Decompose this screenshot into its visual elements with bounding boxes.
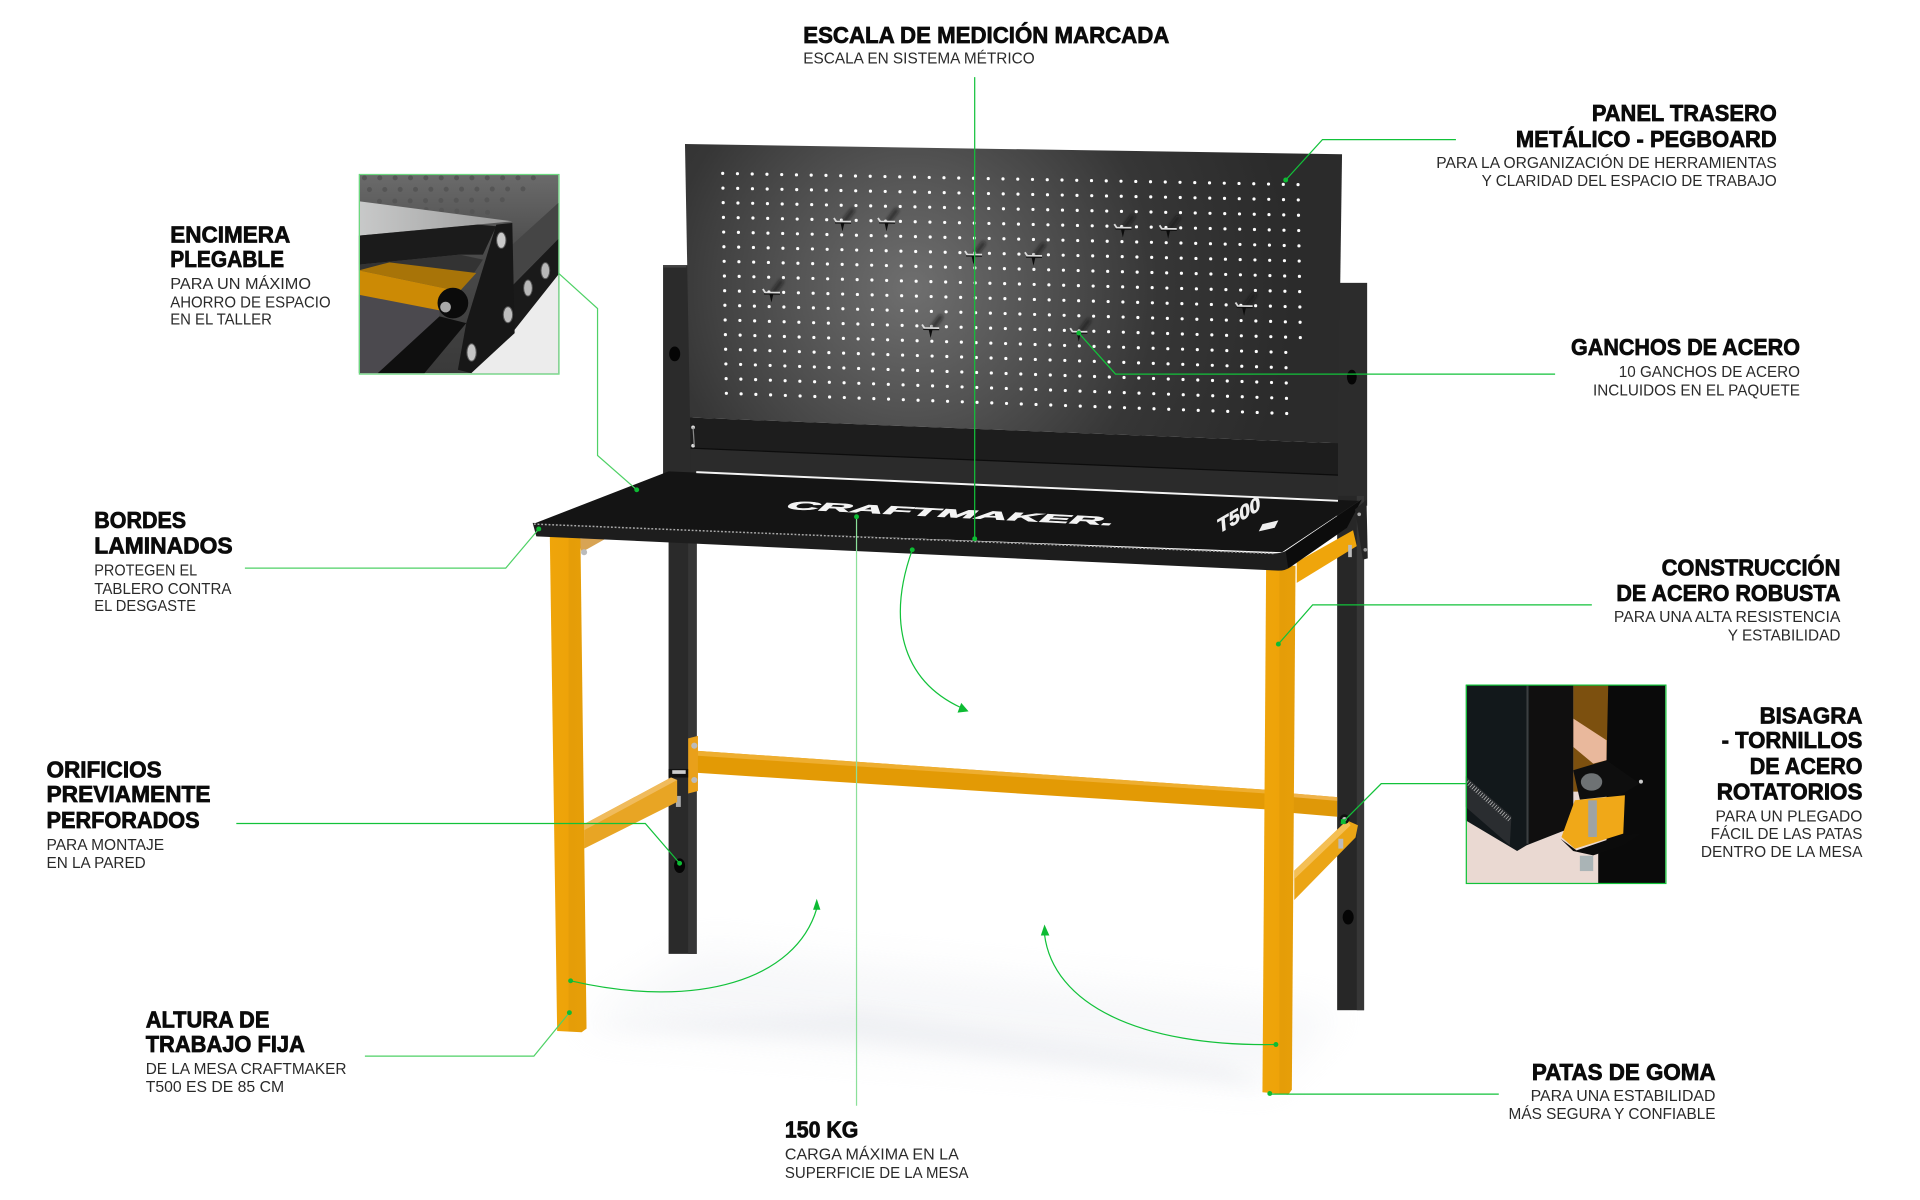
label: laminated edges: BORDES: [94, 507, 186, 533]
label: pegboard: PARA LA ORGANIZACIÓN DE HERRAMIENTAS: [1436, 155, 1777, 172]
label: hinge: ROTATORIOS: [1717, 779, 1862, 805]
label: pre-drilled holes: PARA MONTAJE: [47, 837, 164, 854]
pegboard panel: [685, 144, 1342, 443]
table top: [533, 471, 1368, 571]
arrow: left folding leg: [568, 899, 820, 992]
callout line: rubber feet: [1267, 1091, 1499, 1096]
pegboard holes: [723, 173, 1300, 414]
callout line: working height: [365, 1010, 572, 1056]
label: steel construction: DE ACERO ROBUSTA: [1616, 580, 1840, 606]
label: working height: T500 ES DE 85 CM: [146, 1079, 284, 1096]
left hinge bracket: [669, 736, 698, 807]
label: pre-drilled holes: [47, 757, 211, 872]
label: pre-drilled holes: PREVIAMENTE: [47, 781, 211, 807]
label: hinge: DE ACERO: [1750, 753, 1862, 779]
inset: folding table top: [359, 174, 559, 374]
label: load capacity: CARGA MÁXIMA EN LA: [785, 1147, 960, 1164]
rear lip under pegboard: [690, 418, 1338, 501]
model label on table: [1217, 492, 1278, 539]
callout line: steel hooks: [1076, 331, 1555, 374]
label: rubber feet: PARA UNA ESTABILIDAD: [1531, 1088, 1716, 1105]
label: pre-drilled holes: ORIFICIOS: [47, 757, 162, 783]
callout line: measuring scale: [972, 77, 977, 541]
label: hinge: BISAGRA: [1760, 703, 1862, 729]
label: pegboard: Y CLARIDAD DEL ESPACIO DE TRABAJO: [1482, 173, 1777, 190]
label: steel hooks: 10 GANCHOS DE ACERO: [1619, 364, 1800, 381]
model label on table: T500: [1217, 492, 1261, 539]
label: laminated edges: EL DESGASTE: [94, 598, 196, 615]
callout line: hinge: [1341, 784, 1466, 824]
arrow: right folding leg: [1041, 924, 1278, 1047]
label: working height: TRABAJO FIJA: [146, 1031, 305, 1057]
label: steel construction: PARA UNA ALTA RESISTENCIA: [1614, 609, 1841, 626]
callout line: folding top: [558, 273, 639, 492]
label: steel hooks: GANCHOS DE ACERO: [1571, 334, 1800, 360]
label: pegboard: METÁLICO - PEGBOARD: [1516, 126, 1777, 152]
left side braces: [578, 536, 677, 849]
label: folding top: EN EL TALLER: [170, 311, 272, 328]
steel hooks: [763, 211, 1254, 342]
label: laminated edges: TABLERO CONTRA: [94, 581, 232, 598]
arrow: folding top: [900, 547, 969, 713]
label: load capacity: SUPERFICIE DE LA MESA: [785, 1165, 969, 1182]
label: load capacity: [785, 1117, 969, 1182]
label: hinge: [1701, 703, 1863, 861]
brand name on table: CRAFTMAKER.: [780, 499, 1122, 528]
label: rubber feet: PATAS DE GOMA: [1532, 1059, 1716, 1085]
back right post: [1332, 283, 1367, 1010]
floor shadow: [576, 949, 1341, 1087]
label: pre-drilled holes: PERFORADOS: [47, 807, 200, 833]
label: measuring scale: ESCALA DE MEDICIÓN MARCADA: [803, 22, 1169, 48]
label: working height: [146, 1006, 347, 1096]
label: pegboard: [1436, 100, 1777, 190]
label: working height: DE LA MESA CRAFTMAKER: [146, 1061, 347, 1078]
label: hinge: - TORNILLOS: [1722, 727, 1862, 753]
label: working height: ALTURA DE: [146, 1006, 269, 1032]
label: rubber feet: MÁS SEGURA Y CONFIABLE: [1509, 1106, 1716, 1123]
label: steel hooks: INCLUIDOS EN EL PAQUETE: [1593, 383, 1800, 400]
label: pegboard: PANEL TRASERO: [1592, 100, 1777, 126]
label: measuring scale: ESCALA EN SISTEMA MÉTRICO: [803, 51, 1035, 68]
label: pre-drilled holes: EN LA PARED: [47, 855, 146, 872]
label: folding top: [170, 221, 331, 328]
label: load capacity: 150 KG: [785, 1117, 858, 1143]
front right leg: [1262, 566, 1296, 1095]
callout line: load capacity: [854, 514, 859, 1106]
label: laminated edges: PROTEGEN EL: [94, 563, 197, 580]
label: laminated edges: LAMINADOS: [94, 532, 233, 558]
cross beam: [694, 751, 1337, 817]
right side braces: [1294, 530, 1358, 900]
label: folding top: ENCIMERA: [170, 221, 290, 247]
back left post: [663, 265, 697, 954]
callout line: pegboard: [1283, 140, 1456, 182]
label: folding top: PARA UN MÁXIMO: [170, 276, 311, 293]
callout line: laminated edges: [245, 527, 541, 568]
label: steel hooks: [1571, 334, 1800, 400]
label: folding top: AHORRO DE ESPACIO: [170, 294, 331, 311]
label: hinge: DENTRO DE LA MESA: [1701, 844, 1863, 861]
label: steel construction: [1614, 555, 1841, 644]
label: folding top: PLEGABLE: [170, 246, 284, 272]
label: steel construction: Y ESTABILIDAD: [1728, 627, 1840, 644]
inset: hinge with rotating screws: [1466, 685, 1666, 884]
label: measuring scale: [803, 22, 1169, 68]
label: steel construction: CONSTRUCCIÓN: [1662, 555, 1840, 581]
front left leg: [550, 535, 587, 1032]
callout line: steel construction: [1276, 605, 1592, 647]
label: laminated edges: [94, 507, 233, 615]
label: rubber feet: [1509, 1059, 1716, 1123]
label: hinge: PARA UN PLEGADO: [1716, 809, 1863, 826]
label: hinge: FÁCIL DE LAS PATAS: [1711, 826, 1862, 843]
callout line: pre-drilled holes: [236, 823, 682, 866]
